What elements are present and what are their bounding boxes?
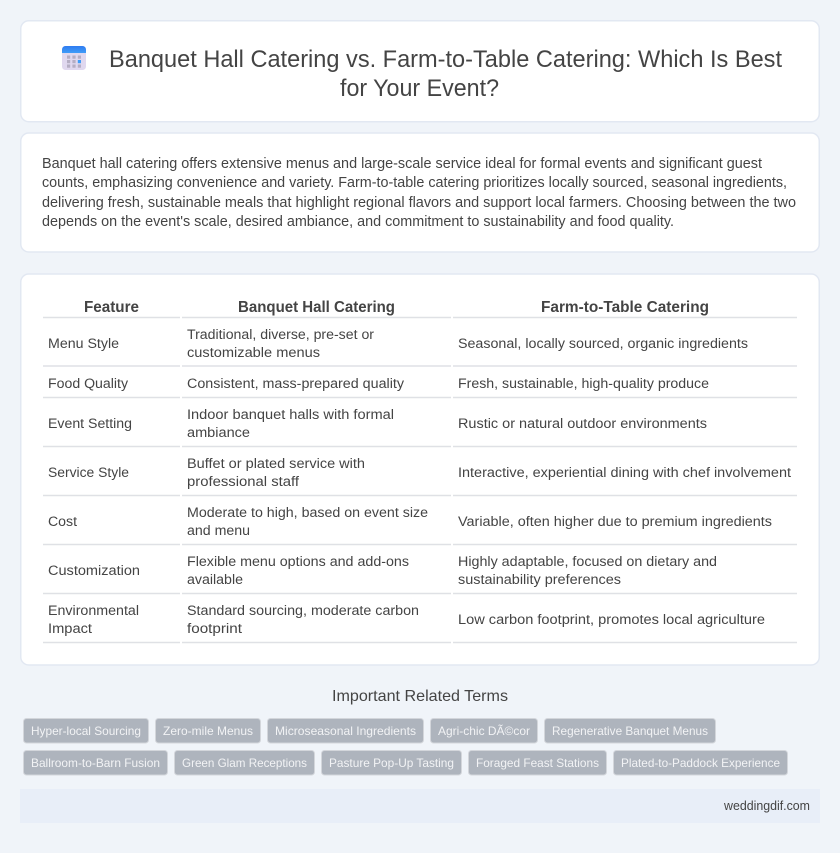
tag: microseasonal ingredients: Microseasonal Ingredients	[275, 724, 416, 738]
tag: regenerative banquet menus: Regenerative Banquet Menus	[552, 724, 708, 738]
panel: related term tags	[24, 718, 788, 775]
table row: menu style: Menu Style	[48, 336, 119, 352]
text block: introduction paragraph: Banquet hall catering offers extensive menus and large-scale service ideal for formal events and significant guest	[42, 156, 762, 172]
table row: event setting: ambiance	[187, 425, 250, 441]
tag: green glam receptions	[174, 750, 314, 775]
title	[109, 46, 782, 102]
table row: food quality	[48, 376, 709, 392]
tag: foraged feast stations: Foraged Feast Stations	[476, 756, 599, 770]
table row: event setting	[48, 407, 707, 441]
tag: plated-to-paddock experience: Plated-to-Paddock Experience	[621, 756, 780, 770]
tag: green glam receptions: Green Glam Receptions	[182, 756, 307, 770]
table row: menu style: Seasonal, locally sourced, organic ingredients	[458, 336, 748, 352]
tag: agri-chic decor: Agri-chic DÃ©cor	[438, 724, 530, 738]
tag: regenerative banquet menus	[544, 718, 716, 743]
table header row: Banquet Hall Catering	[238, 299, 395, 316]
table row: cost: and menu	[187, 523, 250, 539]
tag: hyper-local sourcing	[24, 718, 148, 743]
tag: zero-mile menus: Zero-mile Menus	[163, 724, 253, 738]
table row: environmental impact: Environmental	[48, 603, 139, 619]
table row: event setting: Rustic or natural outdoor environments	[458, 416, 707, 432]
table row: environmental impact: footprint	[187, 621, 242, 637]
panel: header	[21, 21, 819, 122]
text block: introduction paragraph	[42, 156, 796, 230]
table row: food quality: Fresh, sustainable, high-quality produce	[458, 376, 709, 392]
tag: pasture pop-up tasting	[322, 750, 462, 775]
table row: cost: Variable, often higher due to premium ingredients	[458, 514, 772, 530]
table row: service style	[48, 456, 791, 490]
footer: weddingdif.com	[723, 798, 810, 813]
tag: agri-chic decor	[430, 718, 538, 743]
icon: calendar	[62, 46, 86, 70]
tag: plated-to-paddock experience	[614, 750, 788, 775]
table row: environmental impact: Impact	[48, 621, 92, 637]
table row: food quality: Consistent, mass-prepared quality	[187, 376, 405, 392]
table row: service style: professional staff	[187, 474, 299, 490]
title: for Your Event?	[340, 75, 499, 102]
table row: event setting: Indoor banquet halls with formal	[187, 407, 394, 423]
table header row	[84, 299, 709, 316]
tag: foraged feast stations	[468, 750, 606, 775]
table row: service style: Service Style	[48, 465, 129, 481]
tag: zero-mile menus	[156, 718, 260, 743]
heading: important related terms: Important Related Terms	[332, 688, 508, 705]
table row: cost	[48, 505, 772, 539]
table row: customization: available	[187, 572, 243, 588]
table row: cost: Moderate to high, based on event size	[187, 505, 428, 521]
table row: service style: Buffet or plated service with	[187, 456, 365, 472]
table row: food quality: Food Quality	[48, 376, 129, 392]
table row: environmental impact: Standard sourcing, moderate carbon	[187, 603, 419, 619]
table row: customization: Highly adaptable, focused on dietary and	[458, 554, 717, 570]
table row: environmental impact	[48, 603, 765, 637]
panel: introduction	[21, 133, 819, 252]
title: Banquet Hall Catering vs. Farm-to-Table Catering: Which Is Best	[109, 46, 782, 73]
table row: customization: Customization	[48, 563, 140, 579]
table row: environmental impact: Low carbon footprint, promotes local agriculture	[458, 612, 765, 628]
tag: ballroom-to-barn fusion	[24, 750, 168, 775]
table row: customization: sustainability preferences	[458, 572, 621, 588]
table header row: Feature	[84, 299, 139, 316]
table header row: Farm-to-Table Catering	[541, 299, 709, 316]
tag: ballroom-to-barn fusion: Ballroom-to-Barn Fusion	[31, 756, 160, 770]
text block: introduction paragraph: depends on the event's scale, desired ambiance, and commitment to sustainability and food quality.	[42, 214, 674, 230]
table row: menu style: customizable menus	[187, 345, 320, 361]
table row: menu style	[48, 327, 748, 361]
footer	[20, 789, 820, 823]
text block: introduction paragraph: delivering fresh, sustainable meals that highlight regional flavors and support local farmers. Choosing between the two	[42, 195, 796, 211]
table row: event setting: Event Setting	[48, 416, 132, 432]
table row: customization	[48, 554, 717, 588]
tag: pasture pop-up tasting: Pasture Pop-Up Tasting	[329, 756, 454, 770]
table row: customization: Flexible menu options and add-ons	[187, 554, 409, 570]
text block: introduction paragraph: counts, emphasizing convenience and variety. Farm-to-table catering prioritizes locally sourced, seasonal ingredients,	[42, 175, 787, 191]
panel: comparison table	[21, 274, 819, 665]
table row: menu style: Traditional, diverse, pre-set or	[187, 327, 374, 343]
table row: cost: Cost	[48, 514, 77, 530]
tag: microseasonal ingredients	[268, 718, 424, 743]
table row: service style: Interactive, experiential dining with chef involvement	[458, 465, 791, 481]
tag: hyper-local sourcing: Hyper-local Sourcing	[31, 724, 141, 738]
